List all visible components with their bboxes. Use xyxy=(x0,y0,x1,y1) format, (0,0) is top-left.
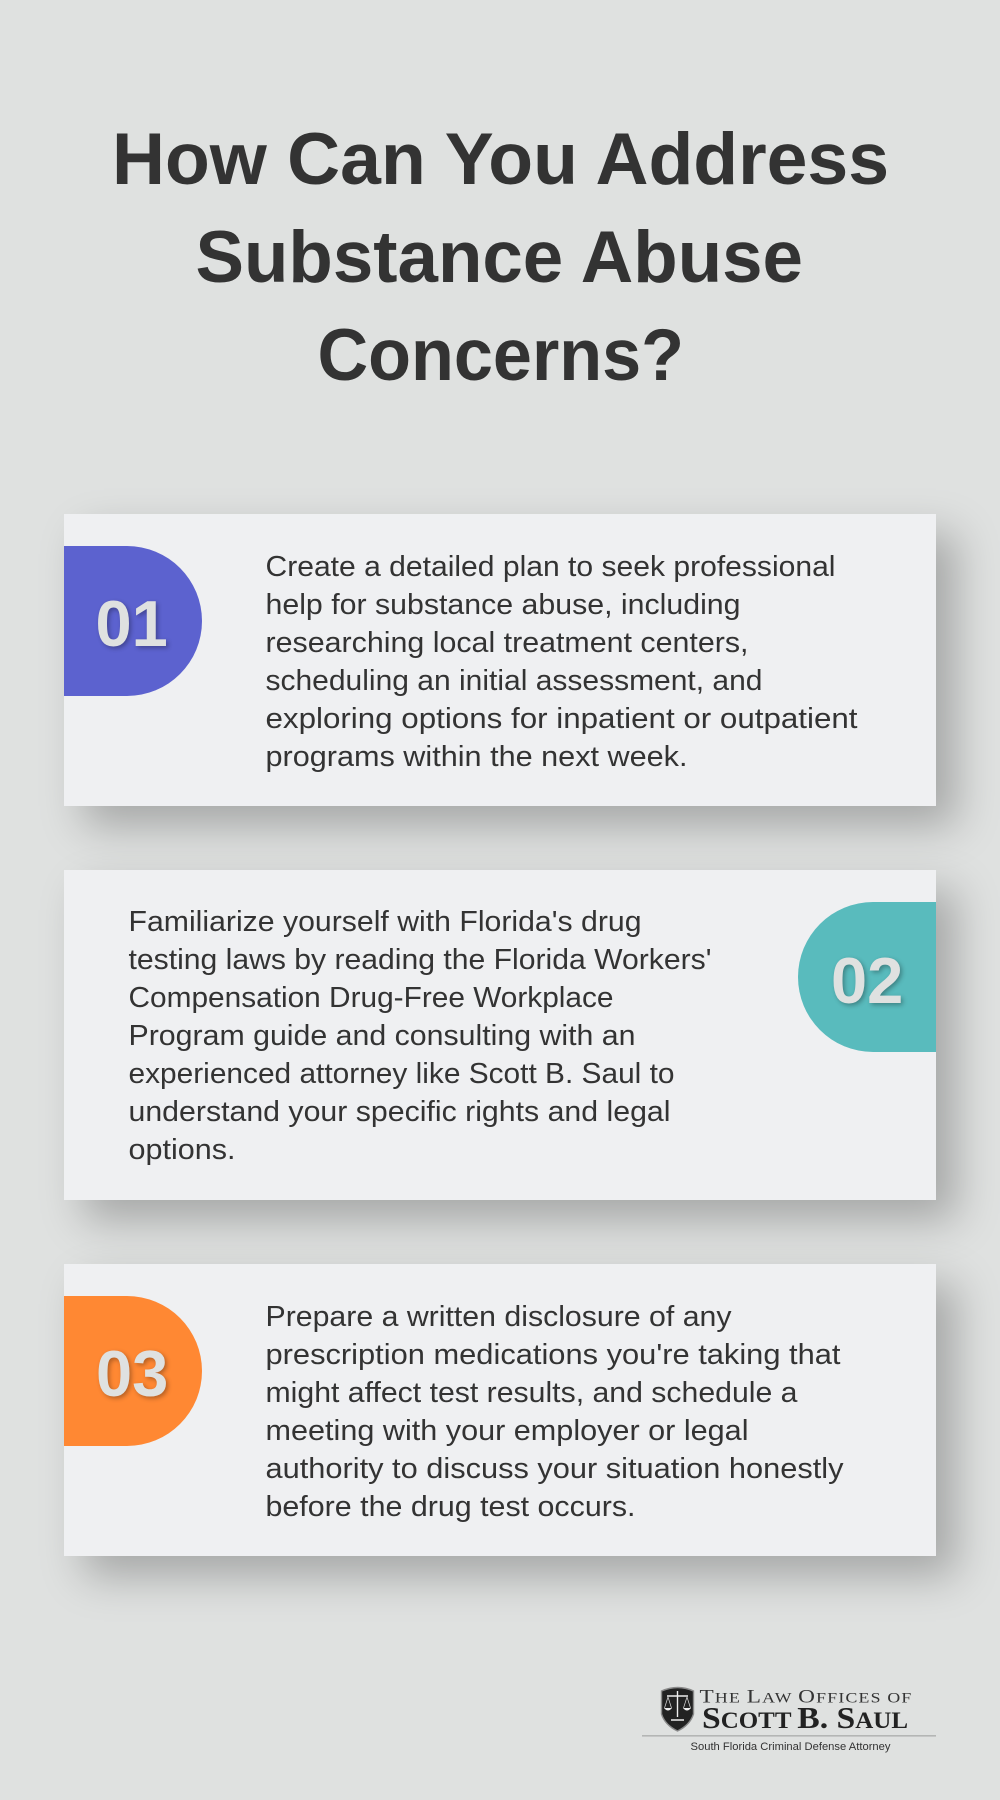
title: Concerns? xyxy=(318,315,684,396)
step 3 text: meeting with your employer or legal xyxy=(266,1415,748,1447)
step 1 text: Create a detailed plan to seek professional xyxy=(266,551,836,583)
step 3 text: authority to discuss your situation honestly xyxy=(266,1453,844,1485)
step 2 text: Compensation Drug-Free Workplace xyxy=(128,982,614,1014)
step 1 text: scheduling an initial assessment, and xyxy=(266,665,762,697)
logo: The Law Offices of Scott B. Saul xyxy=(642,1686,936,1753)
step 2 text: experienced attorney like Scott B. Saul to xyxy=(128,1058,674,1090)
icon: scales of justice shield xyxy=(662,1688,694,1731)
step 1 text xyxy=(266,551,858,773)
panel: step 1 card xyxy=(64,514,936,806)
step 1 text: programs within the next week. xyxy=(266,741,688,773)
step 3 text xyxy=(266,1301,844,1523)
step 3 text: before the drug test occurs. xyxy=(266,1491,636,1523)
step 1 text: help for substance abuse, including xyxy=(266,589,740,621)
panel: step 3 card xyxy=(64,1264,936,1556)
step 2 number: 02 xyxy=(831,944,903,1016)
step 1 badge xyxy=(64,546,202,696)
step 2 text: options. xyxy=(128,1134,236,1166)
step 2 text xyxy=(128,906,712,1166)
step 1 number: 01 xyxy=(96,586,168,660)
logo line 1: THE LAW OFFICES OF xyxy=(700,1686,912,1708)
step 3 text: Prepare a written disclosure of any xyxy=(266,1301,732,1333)
panel: step 2 card xyxy=(64,870,936,1200)
step 1 text: researching local treatment centers, xyxy=(266,627,748,659)
title: How Can You Address xyxy=(112,119,889,200)
title: Substance Abuse xyxy=(196,217,803,298)
step 1 text: exploring options for inpatient or outpatient xyxy=(266,703,858,735)
step 3 badge xyxy=(64,1296,202,1446)
step 3 number: 03 xyxy=(96,1336,168,1410)
title xyxy=(112,119,889,396)
step 3 text: prescription medications you're taking that xyxy=(266,1339,840,1371)
step 2 text: Program guide and consulting with an xyxy=(128,1020,636,1052)
step 2 text: understand your specific rights and legal xyxy=(128,1096,670,1128)
step 2 text: testing laws by reading the Florida Workers' xyxy=(128,944,712,976)
step 3 text: might affect test results, and schedule a xyxy=(266,1377,798,1409)
step 2 badge xyxy=(798,902,936,1052)
logo line 2: SCOTT B. SAUL xyxy=(702,1700,908,1735)
logo tagline: South Florida Criminal Defense Attorney xyxy=(690,1741,891,1753)
step 2 text: Familiarize yourself with Florida's drug xyxy=(128,906,642,938)
